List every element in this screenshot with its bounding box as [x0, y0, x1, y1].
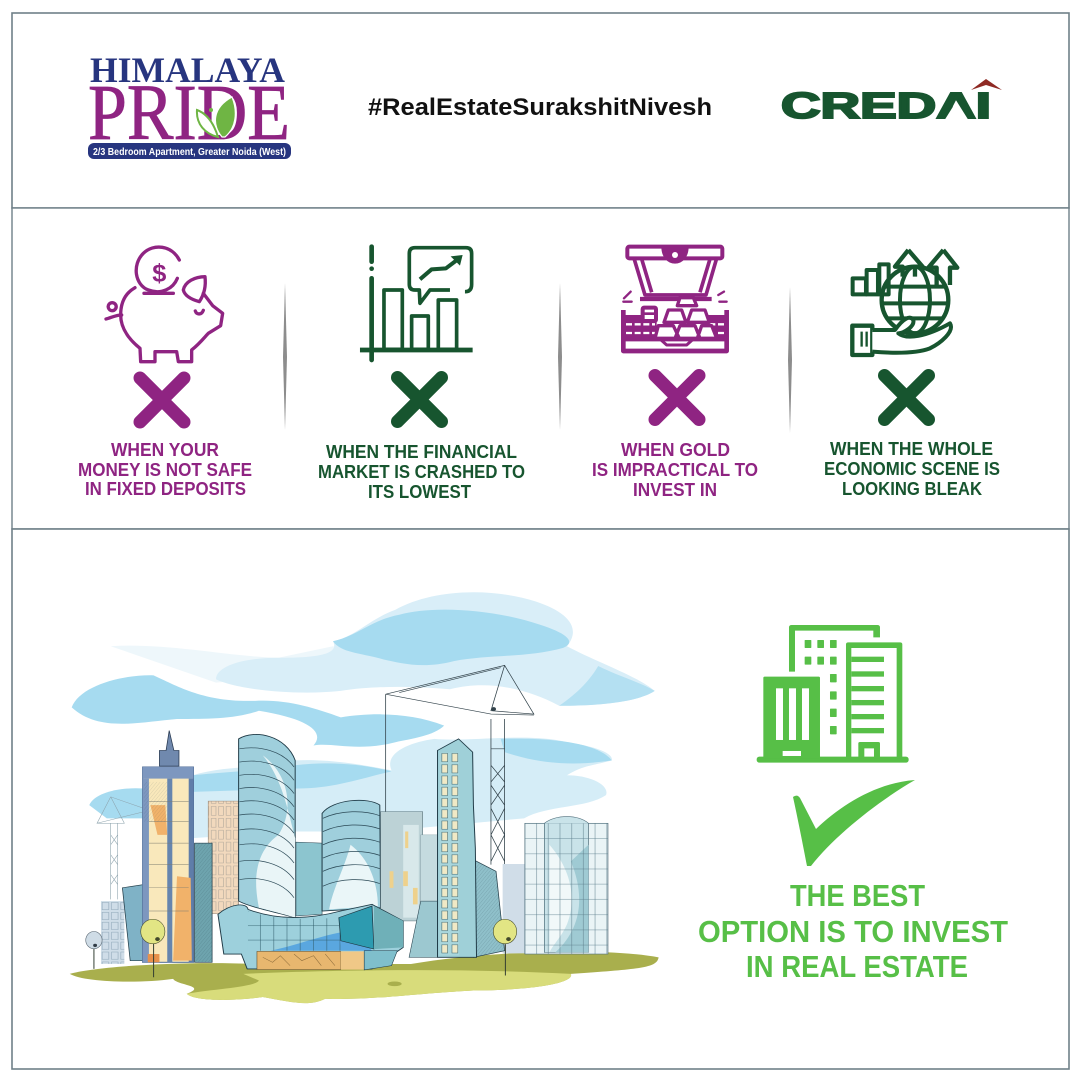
panel: header	[12, 13, 1069, 208]
conclusion text: THE BEST	[790, 878, 925, 913]
caption: economy: ECONOMIC SCENE IS	[824, 459, 1000, 479]
scenario: financial market	[318, 247, 525, 502]
caption: fixed deposits: WHEN YOUR	[111, 440, 219, 460]
separator	[283, 283, 287, 430]
main crane	[386, 665, 534, 865]
caption: fixed deposits: IN FIXED DEPOSITS	[85, 479, 246, 499]
logo: Himalaya Pride: 2/3 Bedroom Apartment, Greater Noida (West)	[93, 146, 286, 158]
icon: cross mark	[884, 376, 928, 420]
gold-windowed tower with spire	[143, 731, 193, 962]
ground	[70, 952, 659, 1003]
icon: cross mark	[655, 376, 699, 420]
illustration: city skyline with cranes and clouds	[70, 592, 659, 1003]
panel: real estate conclusion	[12, 529, 1069, 1069]
icon: piggy bank with coin	[106, 247, 223, 362]
distant crane	[97, 797, 144, 899]
caption: financial market: MARKET IS CRASHED TO	[318, 462, 525, 482]
icon: green check mark	[793, 780, 915, 866]
caption: gold: WHEN GOLD	[621, 440, 730, 460]
separator	[558, 283, 562, 430]
caption: economy: WHEN THE WHOLE	[830, 439, 993, 459]
scenario: gold	[592, 247, 758, 500]
gray mid-rise	[381, 812, 438, 957]
icon: globe on a hand with rising arrows	[852, 250, 957, 355]
caption: fixed deposits: MONEY IS NOT SAFE	[78, 460, 252, 480]
icon: bar chart with speech bubble	[360, 247, 473, 360]
caption: gold: INVEST IN	[633, 480, 717, 500]
caption: financial market: ITS LOWEST	[368, 482, 471, 502]
logo: Himalaya Pride: HIMALAYA	[90, 50, 285, 90]
logo: Himalaya Pride: PRIDE	[88, 70, 290, 157]
small pale buildings	[101, 801, 526, 964]
scenario: fixed deposits	[78, 247, 252, 499]
icon: cross mark	[398, 378, 442, 422]
right glass cluster	[525, 817, 608, 954]
tall curved glass tower	[239, 734, 295, 918]
panel: four warning scenarios	[12, 208, 1069, 529]
separator	[788, 287, 792, 433]
hashtag heading: #RealEstateSurakshitNivesh	[368, 94, 712, 121]
trees	[86, 919, 517, 977]
logo: CREDAI: CREDAI	[781, 85, 991, 126]
icon: green office buildings	[757, 625, 909, 763]
sky clouds	[72, 592, 655, 838]
caption: financial market: WHEN THE FINANCIAL	[326, 442, 517, 462]
icon: treasure chest of gold bars	[623, 247, 727, 351]
caption: gold: IS IMPRACTICAL TO	[592, 460, 758, 480]
conclusion text: OPTION IS TO INVEST	[698, 914, 1008, 949]
icon: piggy bank with coin: $	[152, 260, 166, 288]
tall windowed block	[438, 739, 505, 957]
glass podium	[218, 904, 403, 970]
icon: cross mark	[140, 378, 184, 422]
mid curved tower	[322, 800, 381, 911]
caption: economy: LOOKING BLEAK	[842, 479, 982, 499]
conclusion text: IN REAL ESTATE	[746, 949, 968, 984]
scenario: economy	[824, 250, 1000, 499]
logo: CREDAI	[781, 79, 1002, 126]
